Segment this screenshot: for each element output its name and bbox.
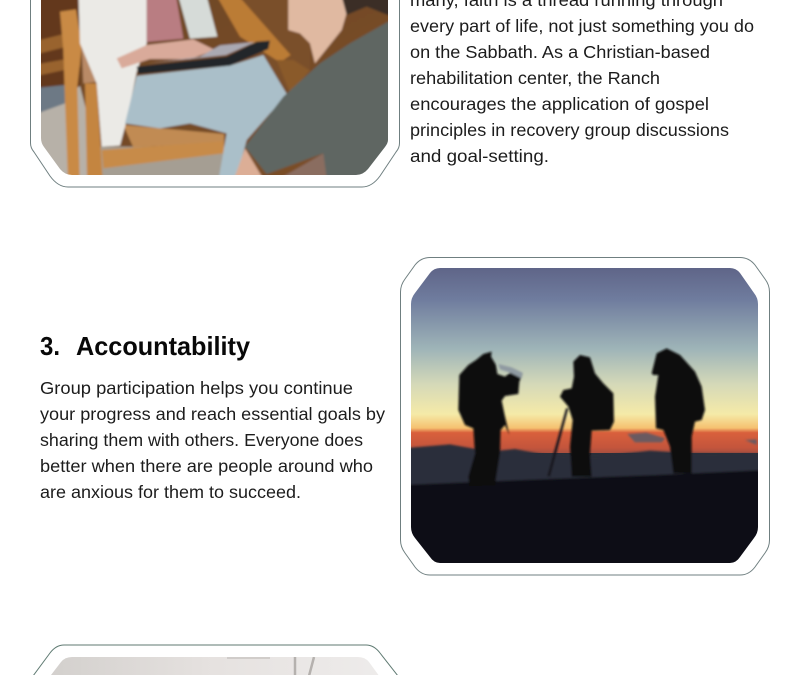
body text: faith paragraph: and goal-setting. — [410, 146, 549, 166]
hiker left — [458, 352, 523, 486]
body text: faith paragraph: on the Sabbath. As a Christian-based — [410, 42, 710, 62]
body text: accountability paragraph: your progress and reach essential goals by — [40, 404, 385, 424]
body text: accountability paragraph: are anxious for them to succeed. — [40, 482, 301, 502]
body text: faith paragraph: rehabilitation center, the Ranch — [410, 68, 660, 88]
body text: faith paragraph — [410, 0, 754, 166]
body text: accountability paragraph: sharing them with others. Everyone does — [40, 430, 363, 450]
hiker right — [652, 348, 705, 473]
photo: pale interior — [41, 657, 388, 675]
heading: 3. Accountability: 3. — [40, 331, 60, 361]
body text: faith paragraph: principles in recovery group discussions — [410, 120, 729, 140]
photo: counsellor and client — [41, 0, 388, 175]
body text: faith paragraph: every part of life, not just something you do — [410, 16, 754, 36]
photo: three hikers silhouetted — [403, 268, 767, 570]
photo frame: hikers at sunset — [400, 258, 770, 575]
body text: accountability paragraph: better when there are people around who — [40, 456, 373, 476]
hiker middle — [560, 355, 614, 477]
body text: accountability paragraph: Group participation helps you continue — [40, 378, 353, 398]
photo frame: next section image (cropped) — [33, 645, 398, 675]
body text: accountability paragraph — [40, 378, 385, 502]
photo frame: counselling session — [30, 0, 400, 190]
body text: faith paragraph: encourages the application of gospel — [410, 94, 709, 114]
heading: 3. Accountability: Accountability — [76, 331, 251, 361]
